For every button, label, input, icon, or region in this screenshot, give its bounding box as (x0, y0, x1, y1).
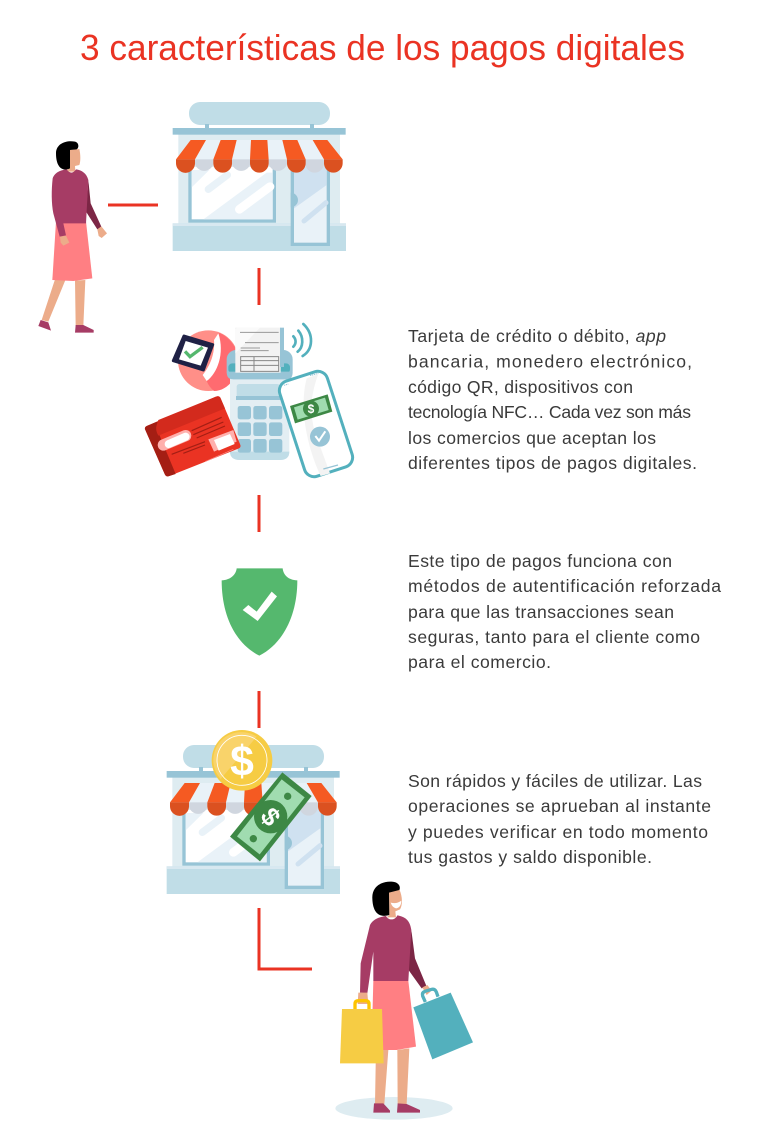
text block: security (408, 551, 721, 672)
banknote: $ (254, 802, 287, 832)
text block: security: para el comercio. (408, 652, 551, 672)
yellow bag (340, 1001, 384, 1063)
coin: $ (230, 737, 254, 785)
text block: speed (408, 771, 711, 867)
text block: payment methods: tecnología NFC… Cada vez son más (408, 402, 691, 422)
text block: payment methods: código QR, dispositivos con (408, 377, 633, 397)
icon: payment methods (145, 324, 355, 479)
title: 3 características de los pagos digitales (80, 27, 685, 68)
text block: security: seguras, tanto para el cliente como (408, 627, 700, 647)
teal bag (413, 989, 473, 1059)
icon: woman walking (38, 141, 107, 333)
watch face (173, 336, 213, 370)
connector: shop to payment (258, 268, 260, 305)
text block: security: métodos de autentificación reforzada (408, 576, 721, 596)
credit card (145, 396, 241, 476)
icon: security shield (222, 568, 297, 656)
card terminal (227, 350, 293, 460)
text block: speed: tus gastos y saldo disponible. (408, 847, 652, 867)
receipt (235, 328, 284, 373)
icon: shop with coin and banknote (167, 730, 340, 894)
phone (277, 369, 355, 479)
connector: security to quick payment (258, 691, 260, 728)
text block: speed: Son rápidos y fáciles de utilizar. Las (408, 771, 702, 791)
contactless waves (293, 324, 311, 356)
connector: payment to security (258, 495, 260, 532)
text block: payment methods: Tarjeta de crédito o débito, app (408, 326, 666, 346)
text block: payment methods: bancaria, monedero electrónico, (408, 352, 692, 372)
text block: speed: operaciones se aprueban al instante (408, 796, 711, 816)
icon: woman with shopping bags (335, 882, 473, 1120)
text block: payment methods: diferentes tipos de pagos digitales. (408, 453, 697, 473)
text block: payment methods (408, 326, 697, 473)
connector: woman to shop (108, 204, 158, 206)
text block: payment methods: los comercios que aceptan los (408, 428, 656, 448)
phone: $ (308, 402, 315, 416)
watch strap (178, 330, 239, 391)
text block: speed: y puedes verificar en todo momento (408, 822, 708, 842)
text block: security: Este tipo de pagos funciona con (408, 551, 672, 571)
text block: security: para que las transacciones sean (408, 602, 674, 622)
connector: shop to shopper (259, 908, 312, 969)
icon: shop front (173, 102, 346, 251)
